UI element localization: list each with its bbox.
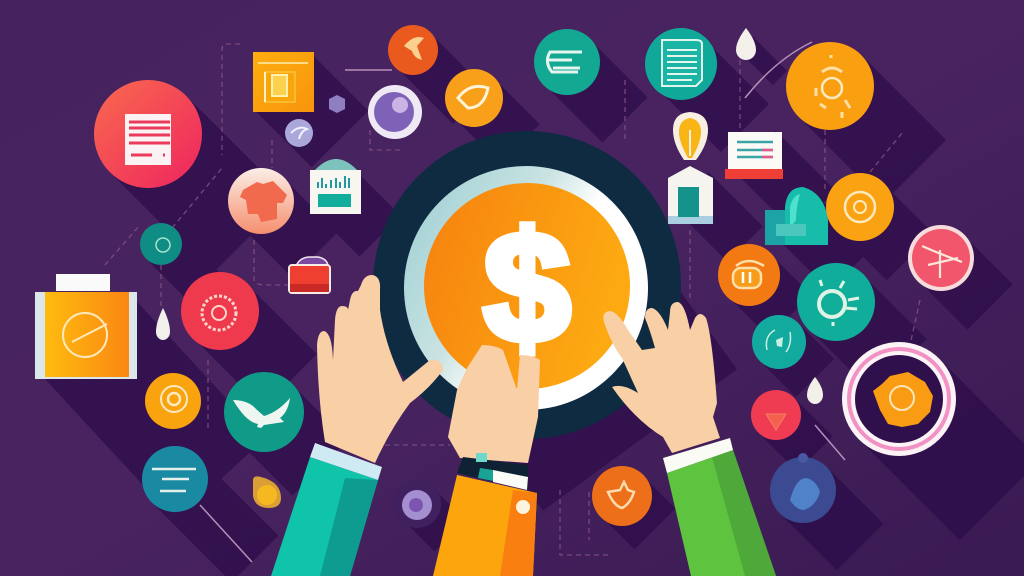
- icon: drop left: [156, 308, 170, 340]
- long shadows: [86, 44, 1000, 559]
- sleeve: left teal: [271, 443, 382, 576]
- icon: teal gear circle: [797, 263, 875, 341]
- icon: red target circle: [181, 272, 259, 350]
- icon: teal arch: [765, 187, 828, 245]
- icon: orange square: [253, 52, 314, 112]
- icon: teal list circle: [142, 446, 208, 512]
- icon: teal bird circle: [224, 372, 304, 452]
- icon: red briefcase: [289, 257, 330, 293]
- hand: left: [317, 275, 443, 463]
- icon: small hexagon: [329, 95, 345, 113]
- hand: middle: [448, 345, 540, 463]
- icon: orange tag: [253, 476, 281, 508]
- icon: orange circle top right: [786, 42, 874, 130]
- coin face: [424, 183, 630, 389]
- icon: small teal circle left: [140, 223, 182, 265]
- icon: small orange circle top: [388, 25, 438, 75]
- watch band: [457, 453, 528, 490]
- icon: orange ring circle: [145, 373, 201, 429]
- icon: red triangle circle: [751, 390, 801, 440]
- dollar sign: $: [484, 201, 570, 375]
- icon: teal document circle: [645, 28, 717, 100]
- icon: purple blue orb: [770, 453, 836, 523]
- icon: peach circle: [228, 168, 294, 234]
- icon: pink crossed circle: [908, 225, 974, 291]
- icon: light bulb house: [668, 112, 713, 224]
- coin dark backing: [373, 131, 681, 439]
- coin ring: [404, 166, 648, 410]
- icon: small blue circle: [285, 119, 313, 147]
- icon: large red document circle: [94, 80, 202, 188]
- icon: orange circle mid right: [826, 173, 894, 241]
- sleeve: middle orange: [433, 475, 537, 576]
- icon: teal swirl circle: [752, 315, 806, 369]
- panel: central coin: [373, 131, 681, 439]
- sleeve: right green: [663, 438, 776, 576]
- icon: orange shield circle: [592, 466, 652, 526]
- icon: orange circle with glyph: [718, 244, 780, 306]
- hand: right: [603, 302, 720, 453]
- icon: yellow orange circle: [445, 69, 503, 127]
- icon: chart card: [310, 159, 361, 214]
- icon: drop right: [807, 377, 823, 404]
- icon: large pink ring badge: [842, 342, 956, 456]
- icon: purple badge: [393, 480, 441, 528]
- icon: teal note circle: [534, 29, 600, 95]
- icon: orange folder box: [35, 274, 137, 379]
- icon: report card: [725, 132, 783, 179]
- icon: white drop: [736, 28, 756, 60]
- circuit lines: [105, 44, 920, 555]
- icon: purple lens: [368, 85, 422, 139]
